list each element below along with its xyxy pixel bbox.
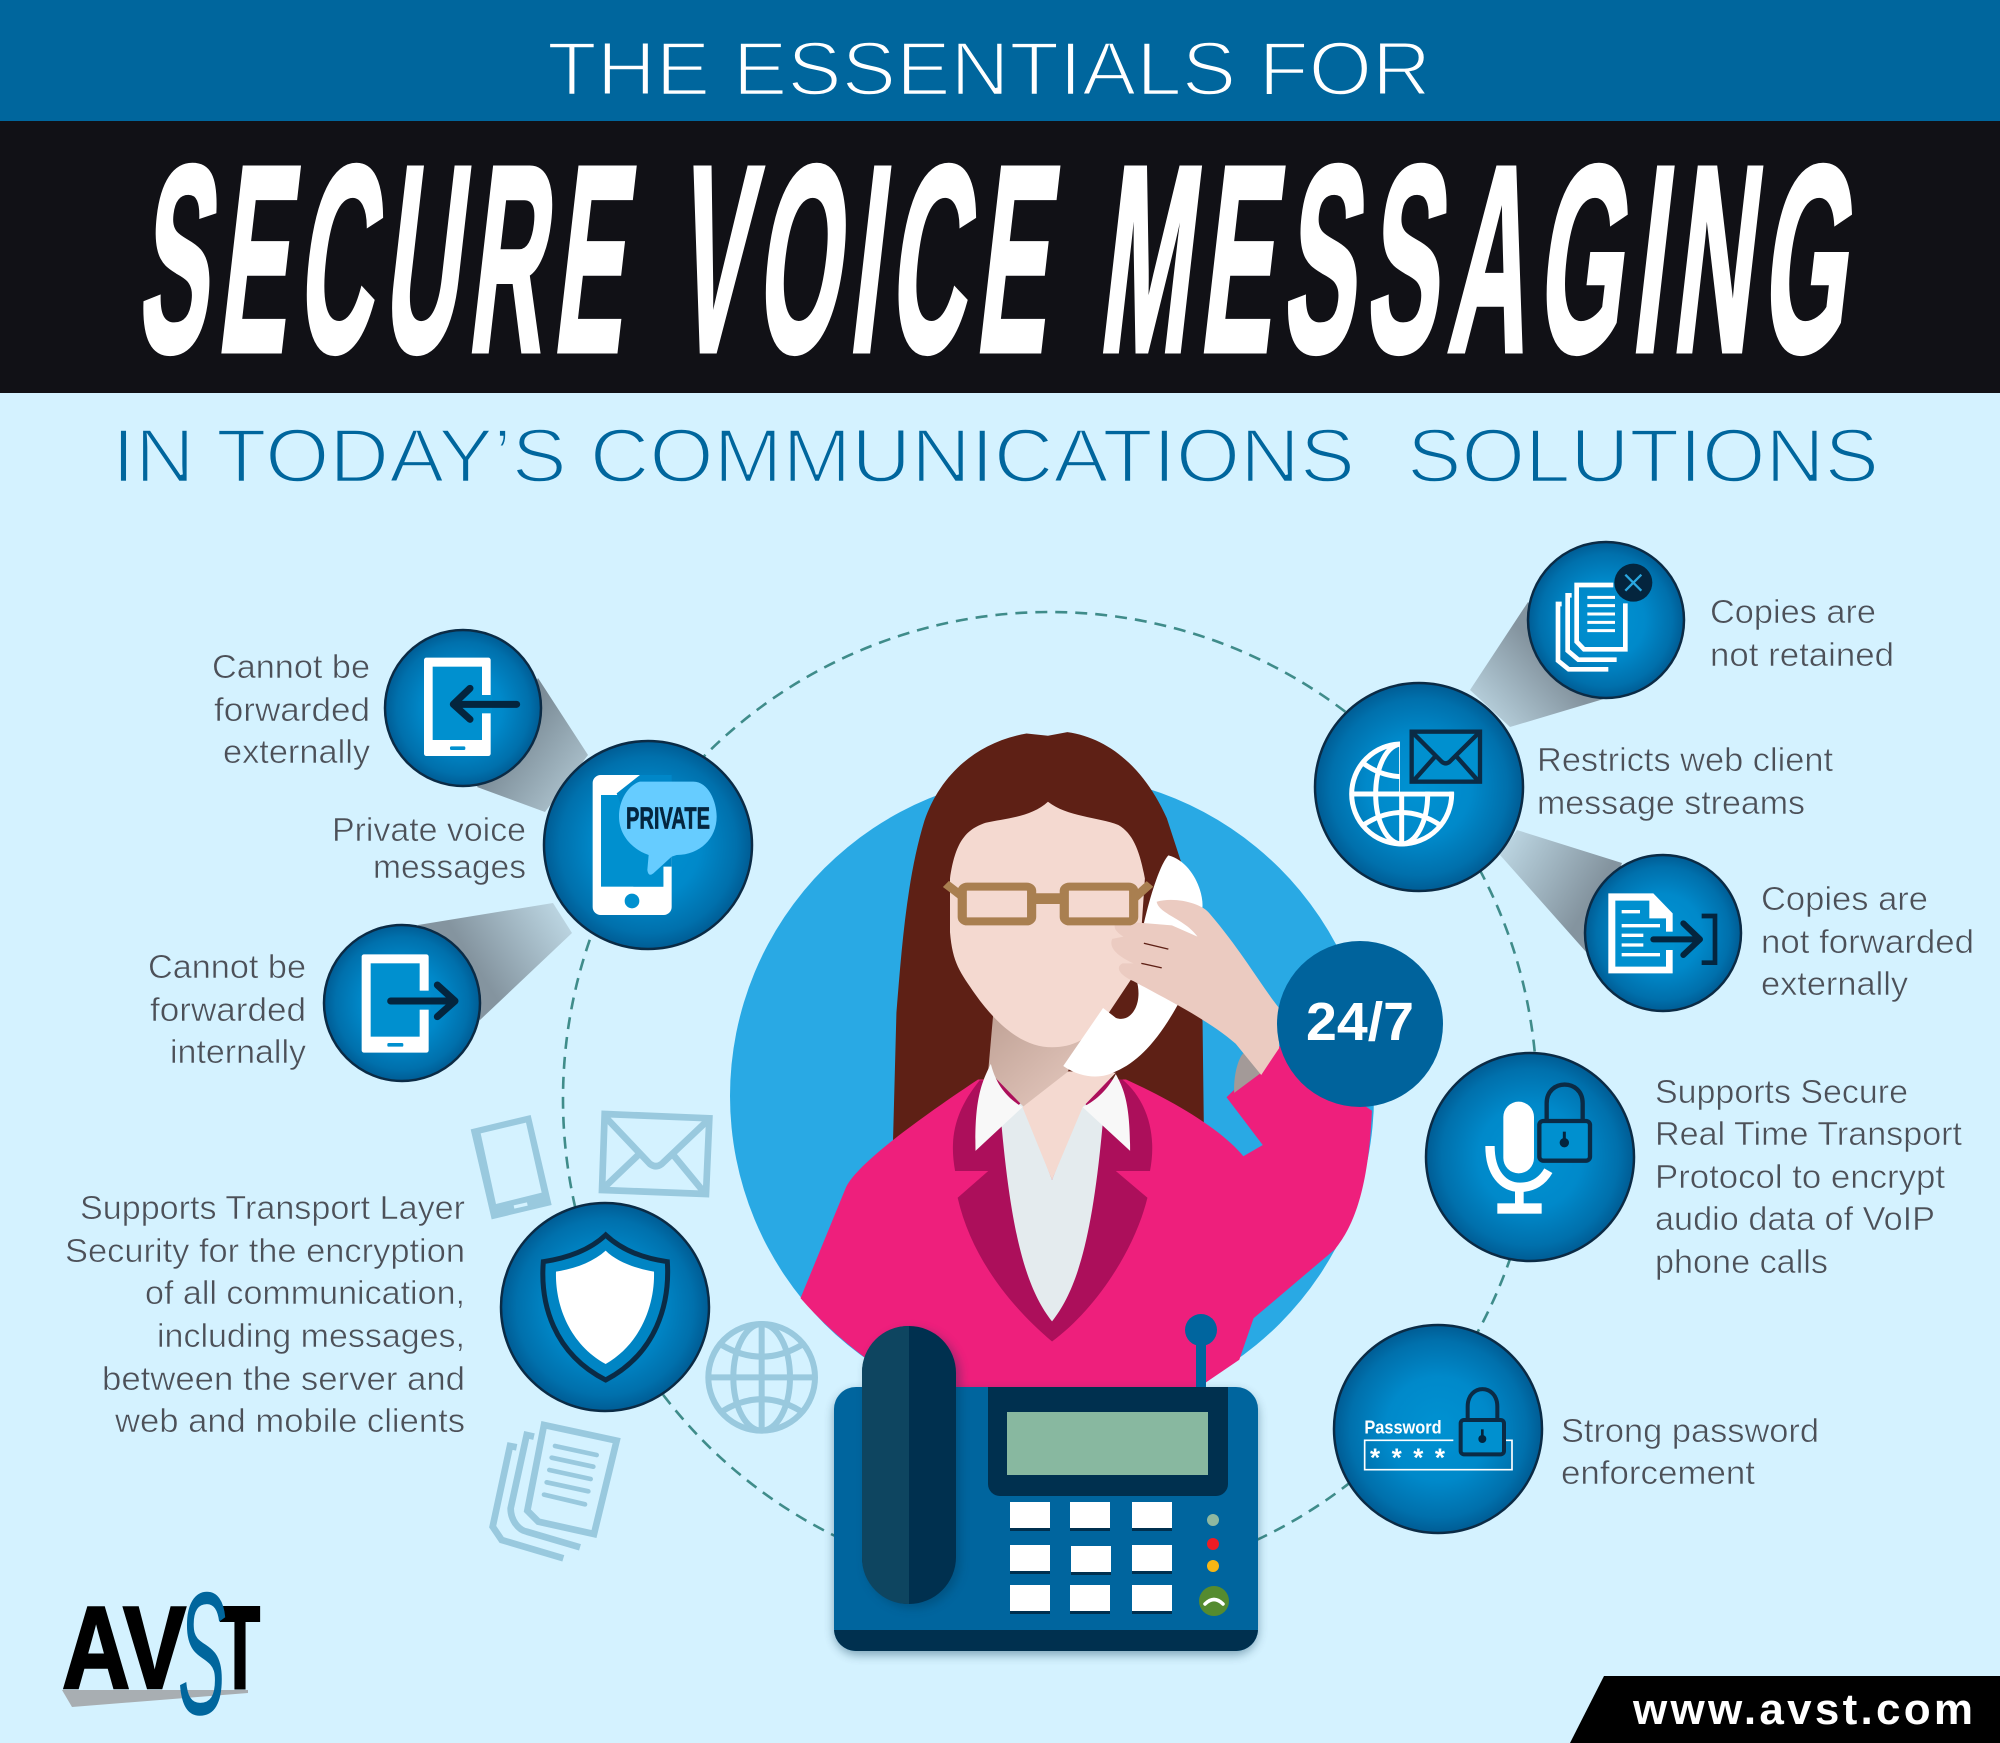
label: private voice messages: Private voice (332, 811, 526, 848)
icon: globe with envelope (1352, 732, 1480, 845)
label: secure real time transport protocol: phone calls (1655, 1243, 1828, 1280)
inner sleeve shadow (1234, 1053, 1261, 1093)
title band: secure voice messaging: VOICE (667, 110, 1082, 408)
label: restricts web client message streams: Restricts web client (1537, 741, 1833, 778)
label: transport layer security: web and mobile clients (114, 1402, 465, 1439)
hair (893, 732, 1204, 1146)
icon: document stack with x (1558, 564, 1652, 669)
circle: cannot be forwarded internally (324, 925, 480, 1081)
faded icon: globe (708, 1324, 815, 1431)
label: strong password enforcement: Strong password (1561, 1412, 1819, 1449)
label: cannot be forwarded externally: Cannot be (212, 648, 370, 685)
label: private voice messages (332, 811, 526, 885)
label: secure real time transport protocol: Supports Secure (1655, 1073, 1908, 1110)
badge: 24/7 (1277, 941, 1443, 1107)
connector wedge: private to forwarded externally (477, 678, 588, 812)
faded background icons (471, 1114, 815, 1558)
circle: copies are not forwarded externally (1585, 855, 1741, 1011)
icon: document with outgoing arrow (1608, 893, 1715, 973)
face (950, 802, 1145, 1047)
circle: secure real time transport protocol (1426, 1053, 1634, 1261)
logo: AVST: AV (62, 1582, 186, 1713)
label: restricts web client message streams (1537, 741, 1833, 821)
label: copies are not retained: not retained (1710, 636, 1894, 673)
label: cannot be forwarded internally: internally (170, 1033, 307, 1070)
website banner: www.avst.com (1632, 1685, 1973, 1734)
label: transport layer security: including messages, (157, 1317, 465, 1354)
label: copies are not retained: Copies are (1710, 593, 1876, 630)
big blue circle behind the woman (730, 774, 1374, 1418)
label: secure real time transport protocol (1655, 1073, 1962, 1280)
icon: microphone with padlock (1490, 1085, 1590, 1214)
icon: shield (543, 1235, 668, 1380)
label: transport layer security: Security for the encryption (65, 1232, 465, 1269)
label: restricts web client message streams: message streams (1537, 784, 1805, 821)
label: copies are not forwarded externally: externally (1761, 965, 1909, 1002)
phone handset (1063, 855, 1203, 1077)
label: secure real time transport protocol: audio data of VoIP (1655, 1200, 1935, 1237)
neck (988, 1012, 1093, 1107)
website banner (1570, 1676, 2000, 1743)
icon: tablet with incoming arrow (424, 658, 517, 756)
shirt (1001, 1102, 1103, 1321)
subtitle: in today's communications solutions: SOLUTIONS (1407, 414, 1879, 499)
subtitle: in today's communications solutions (112, 414, 1879, 499)
header band: the essentials for: THE ESSENTIALS FOR (547, 27, 1431, 112)
label: secure real time transport protocol: Protocol to encrypt (1655, 1158, 1945, 1195)
antenna (1185, 1314, 1217, 1390)
label: copies are not forwarded externally (1761, 880, 1974, 1002)
illustration: desk telephone (834, 1314, 1258, 1655)
label: cannot be forwarded internally: Cannot be (148, 948, 306, 985)
label: strong password enforcement (1561, 1412, 1819, 1491)
label: cannot be forwarded externally (212, 648, 371, 770)
logo: AVST: T (220, 1582, 260, 1713)
dashed orbit ring (563, 612, 1537, 1586)
circle: copies are not retained (1528, 542, 1684, 698)
label: transport layer security: of all communication, (145, 1274, 465, 1311)
keypad (1010, 1502, 1172, 1614)
faded icon: tablet (471, 1115, 552, 1219)
icon: password field with padlock (1364, 1389, 1512, 1473)
collar (975, 1064, 1130, 1151)
circle: private voice messages (544, 741, 752, 949)
lapels (953, 1079, 1152, 1341)
logo: AVST (62, 1557, 260, 1743)
label: transport layer security: Supports Transport Layer (80, 1189, 465, 1226)
badge: 24/7: 24/7 (1306, 992, 1414, 1052)
faded icon: documents (493, 1425, 617, 1558)
subtitle: in today's communications solutions: IN TODAY’S COMMUNICATIONS (112, 414, 1355, 499)
circle: restricts web client message streams (1315, 683, 1523, 891)
circle: strong password enforcement (1334, 1325, 1542, 1533)
label: secure real time transport protocol: Real Time Transport (1655, 1115, 1962, 1152)
label: copies are not retained (1710, 593, 1894, 673)
jacket (801, 1046, 1372, 1400)
title band: secure voice messaging: SECURE (130, 110, 658, 408)
label: strong password enforcement: enforcement (1561, 1454, 1755, 1491)
label: cannot be forwarded externally: forwarded (214, 691, 370, 728)
header band: the essentials for (0, 0, 2000, 121)
label: transport layer security (65, 1189, 465, 1439)
display (988, 1387, 1228, 1496)
label: cannot be forwarded externally: externally (223, 733, 371, 770)
circle: transport layer security (501, 1203, 709, 1411)
hand and arm (1111, 900, 1279, 1075)
label: copies are not forwarded externally: not forwarded (1761, 923, 1974, 960)
label: cannot be forwarded internally: forwarded (150, 991, 306, 1028)
status lights (1199, 1514, 1229, 1616)
icon: password field with padlock: **** (1370, 1443, 1446, 1473)
circle: cannot be forwarded externally (385, 630, 541, 786)
icon: tablet with outgoing arrow (362, 954, 455, 1053)
telephone body (834, 1387, 1258, 1651)
title band: secure voice messaging (0, 110, 2000, 408)
bare chest (1022, 1071, 1116, 1180)
connector wedge: web client to copies not forwarded (1500, 830, 1622, 953)
label: private voice messages: messages (373, 848, 526, 885)
connector wedge: web client to copies not retained (1470, 602, 1607, 727)
icon: password field with padlock: Password (1364, 1416, 1442, 1437)
connector wedge: private to forwarded internally (418, 903, 572, 1020)
label: cannot be forwarded internally (148, 948, 307, 1070)
label: transport layer security: between the server and (102, 1360, 465, 1397)
glasses (946, 884, 1150, 921)
illustration: woman on the phone (801, 732, 1372, 1400)
handset (862, 1326, 960, 1608)
label: copies are not forwarded externally: Copies are (1761, 880, 1928, 917)
faded icon: envelope (602, 1114, 709, 1194)
icon: smartphone with private speech bubble: PRIVATE (626, 801, 710, 835)
